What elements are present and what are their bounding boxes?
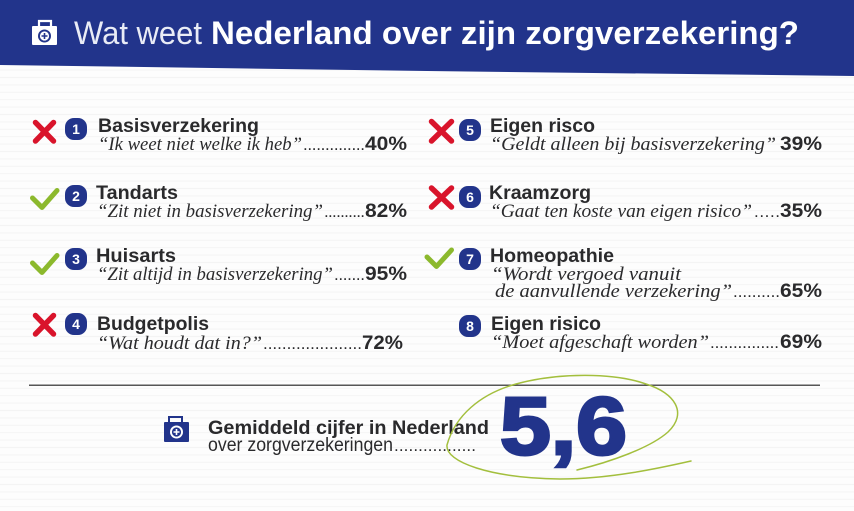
heading and quote 8: “Moet afgeschaft worden” [491, 332, 709, 353]
item 6: Kraamzorg [432, 183, 822, 222]
number badge 6: 6 [466, 189, 474, 205]
heading and quote 7: Homeopathie [490, 246, 614, 267]
heading and quote 3: 95% [365, 264, 407, 285]
heading and quote 4: Budgetpolis [97, 314, 209, 335]
green hand-drawn circle [447, 375, 691, 479]
number badge 3: 3 [72, 251, 80, 267]
number badge 3 [65, 248, 87, 270]
heading and quote 4: 72% [362, 333, 403, 354]
heading and quote 4 [97, 314, 403, 354]
number badge 6 [459, 186, 481, 208]
score value: 5,6 [500, 381, 627, 472]
heading and quote 2: “Zit niet in basisverzekering” [97, 201, 323, 222]
heading and quote 6: ..... [754, 202, 780, 221]
item 3: Huisarts [32, 246, 407, 285]
item 4: Budgetpolis [36, 313, 403, 354]
heading and quote 3: Huisarts [96, 246, 176, 267]
heading and quote 3: ....... [334, 265, 365, 284]
heading and quote 8: ............... [710, 333, 779, 352]
item 7: Homeopathie [427, 246, 822, 302]
number badge 5: 5 [466, 122, 474, 138]
heading and quote 1: .............. [303, 135, 365, 154]
title: Wat weet [74, 15, 202, 51]
header banner [0, 0, 854, 76]
number badge 7: 7 [466, 251, 474, 267]
heading and quote 7: 65% [780, 281, 822, 302]
heading and quote 1 [98, 116, 407, 155]
icon: red cross [432, 122, 452, 141]
heading and quote 5: Eigen risco [490, 116, 595, 137]
heading and quote 5: 39% [780, 134, 822, 155]
heading and quote 5: “Geldt alleen bij basisverzekering” [490, 134, 776, 155]
heading and quote 1: Basisverzekering [98, 116, 259, 137]
heading and quote 3 [96, 246, 407, 285]
heading and quote 4: ..................... [263, 334, 362, 353]
number badge 2: 2 [72, 188, 80, 204]
number badge 7 [459, 248, 481, 270]
heading and quote 2: .......... [324, 202, 365, 221]
score label: ................. [394, 436, 476, 455]
heading and quote 8: Eigen risico [491, 314, 601, 335]
item 5: Eigen risco [432, 116, 822, 155]
item 2: Tandarts [32, 183, 407, 222]
number badge 1: 1 [72, 121, 80, 137]
icon: red cross [36, 122, 54, 141]
heading and quote 7: .......... [733, 282, 780, 301]
number badge 5 [459, 119, 481, 141]
heading and quote 8: 69% [780, 332, 822, 353]
heading and quote 8 [491, 314, 822, 353]
heading and quote 2: Tandarts [96, 183, 178, 204]
icon: red cross [36, 316, 54, 334]
score label [208, 418, 489, 456]
icon: green check [32, 256, 57, 272]
heading and quote 6: 35% [780, 201, 822, 222]
heading and quote 2 [96, 183, 407, 222]
heading and quote 1: “Ik weet niet welke ik heb” [98, 134, 302, 155]
average score block [164, 375, 691, 479]
number badge 4 [65, 313, 87, 335]
score label: Gemiddeld cijfer in Nederland [208, 418, 489, 439]
number badge 8 [459, 315, 481, 337]
heading and quote 6: “Gaat ten koste van eigen risico” [490, 201, 752, 222]
icon: white medical case [32, 21, 57, 45]
heading and quote 4: “Wat houdt dat in?” [97, 333, 262, 354]
heading and quote 2: 82% [365, 201, 407, 222]
icon: green check [32, 190, 57, 208]
heading and quote 7: “Wordt vergoed vanuit [491, 264, 682, 285]
icon: green check [427, 250, 452, 266]
heading and quote 7: de aanvullende verzekering” [495, 281, 732, 302]
heading and quote 7 [490, 246, 822, 302]
heading and quote 5 [490, 116, 822, 155]
number badge 4: 4 [72, 316, 80, 332]
number badge 1 [65, 118, 87, 140]
title: Nederland over zijn zorgverzekering? [211, 15, 799, 51]
heading and quote 3: “Zit altijd in basisverzekering” [97, 264, 333, 285]
item 1: Basisverzekering [36, 116, 407, 155]
heading and quote 6 [489, 183, 822, 222]
item 8: Eigen risico [459, 314, 822, 353]
score label: over zorgverzekeringen [208, 435, 393, 456]
icon: blue medical case [164, 417, 189, 442]
icon: red cross [432, 188, 452, 207]
heading and quote 6: Kraamzorg [489, 183, 591, 204]
number badge 8: 8 [466, 318, 474, 334]
heading and quote 1: 40% [365, 134, 407, 155]
number badge 2 [65, 185, 87, 207]
